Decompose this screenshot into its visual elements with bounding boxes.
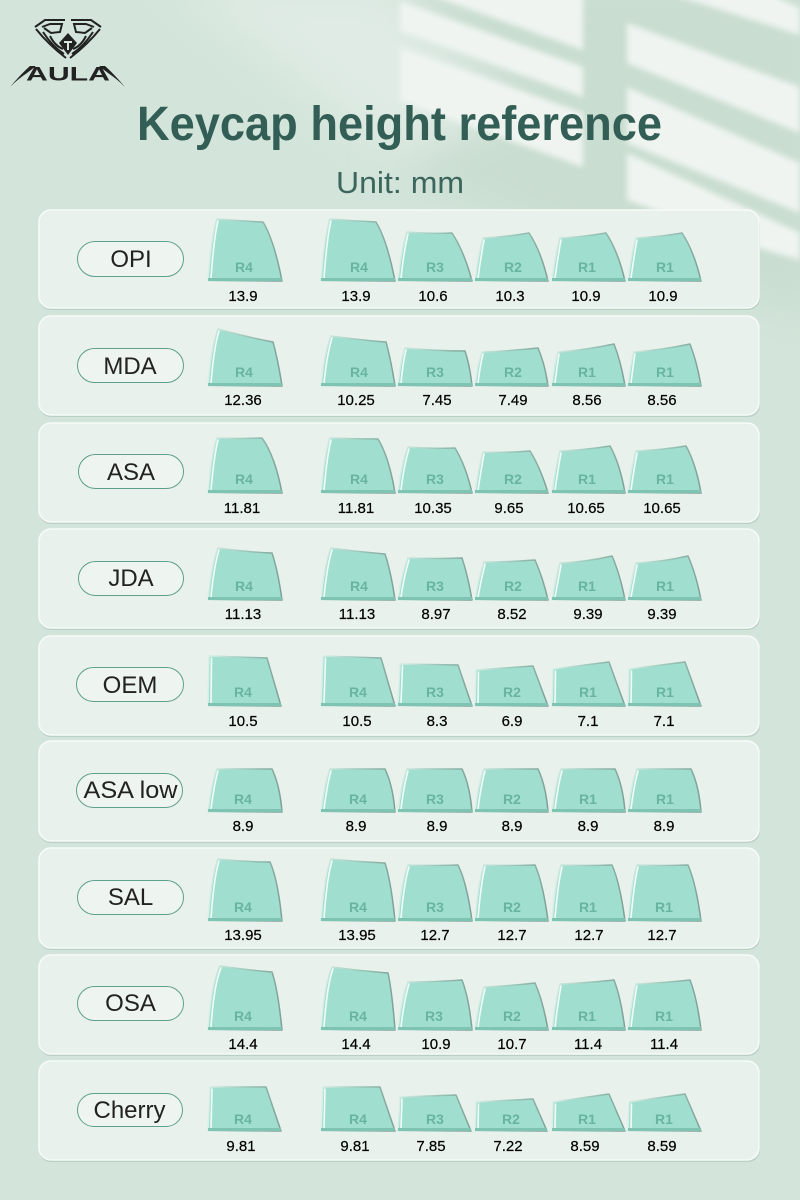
- keycap SAL R3 12.7: [398, 865, 472, 944]
- pill: OPI: [78, 242, 184, 276]
- keycap SAL R1 12.7: 12.7: [574, 927, 604, 944]
- keycap OSA R3 10.9: 10.9: [421, 1036, 451, 1053]
- keycap ASA low R2 8.9: R2: [503, 791, 521, 807]
- keycap ASA R2 9.65: R2: [504, 471, 522, 487]
- keycap OEM R4 10.5: [321, 656, 395, 730]
- panel: OSA: [39, 955, 760, 1056]
- keycap JDA R3 8.97: R3: [426, 578, 444, 594]
- keycap Cherry R4 9.81: R4: [234, 1111, 252, 1127]
- keycap Cherry R3 7.85: [398, 1095, 471, 1155]
- keycap ASA low R1 8.9: R1: [579, 791, 597, 807]
- logo: AULA: [10, 20, 125, 87]
- keycap OEM R1 7.1: 7.1: [654, 713, 674, 730]
- keycap ASA R1 10.65: R1: [578, 471, 596, 487]
- keycap JDA R3 8.97: 8.97: [421, 606, 451, 623]
- pill: JDA: [78, 562, 184, 596]
- keycap ASA low R1 8.9: [552, 769, 625, 835]
- keycap OEM R2 6.9: R2: [503, 684, 521, 700]
- keycap OSA R2 10.7: [475, 983, 548, 1053]
- keycap ASA low R2 8.9: [475, 769, 548, 835]
- keycap MDA R4 10.25: [321, 336, 395, 409]
- keycap SAL R4 13.95: 13.95: [338, 927, 376, 944]
- keycap OPI R1 10.9: [628, 233, 701, 305]
- keycap OSA R4 14.4: 14.4: [228, 1036, 258, 1053]
- keycap OSA R2 10.7: 10.7: [497, 1036, 527, 1053]
- keycap MDA R1 8.56: [552, 344, 625, 409]
- pill: OSA: OSA: [105, 990, 156, 1017]
- keycap OEM R1 7.1: [628, 662, 701, 730]
- keycap OEM R1 7.1: [552, 662, 625, 730]
- keycap SAL R4 13.95: R4: [234, 899, 252, 915]
- keycap MDA R2 7.49: [475, 348, 548, 409]
- keycap JDA R4 11.13: [321, 548, 395, 623]
- keycap SAL R2 12.7: 12.7: [497, 927, 527, 944]
- keycap MDA R3 7.45: [398, 348, 472, 409]
- keycap JDA R2 8.52: [475, 560, 548, 623]
- keycap ASA low R4 8.9: R4: [349, 791, 367, 807]
- keycap ASA R2 9.65: [475, 451, 548, 517]
- keycap MDA R1 8.56: [628, 344, 701, 409]
- keycap OEM R2 6.9: [475, 666, 548, 730]
- keycap MDA R4 12.36: R4: [235, 364, 253, 380]
- keycap ASA low R1 8.9: R1: [656, 791, 674, 807]
- keycap ASA R4 11.81: [208, 438, 282, 517]
- keycap SAL R1 12.7: R1: [655, 899, 673, 915]
- keycap JDA R4 11.13: R4: [235, 578, 253, 594]
- keycap Cherry R1 8.59: R1: [578, 1111, 596, 1127]
- keycap MDA R4 12.36: 12.36: [224, 392, 262, 409]
- keycap JDA R3 8.97: [398, 558, 472, 623]
- keycap JDA R1 9.39: 9.39: [647, 606, 677, 623]
- keycap OEM R4 10.5: 10.5: [228, 713, 258, 730]
- keycap MDA R1 8.56: 8.56: [572, 392, 602, 409]
- keycap OPI R2 10.3: 10.3: [495, 288, 525, 305]
- keycap ASA low R3 8.9: R3: [426, 791, 444, 807]
- keycap Cherry R4 9.81: [208, 1087, 281, 1155]
- keycap ASA low R1 8.9: [628, 769, 701, 835]
- keycap Cherry R1 8.59: 8.59: [647, 1138, 677, 1155]
- keycap ASA R4 11.81: 11.81: [338, 500, 374, 517]
- keycap SAL R2 12.7: [475, 865, 548, 944]
- keycap OEM R4 10.5: 10.5: [342, 713, 372, 730]
- keycap OPI R4 13.9: R4: [350, 259, 368, 275]
- pill: ASA: ASA: [107, 459, 155, 486]
- keycap OPI R4 13.9: [321, 219, 395, 305]
- pill: OPI: OPI: [110, 246, 152, 273]
- keycap OPI R2 10.3: R2: [504, 259, 522, 275]
- keycap OEM R1 7.1: R1: [579, 684, 597, 700]
- swoosh legs: [10, 66, 125, 87]
- keycap ASA R2 9.65: 9.65: [494, 500, 524, 517]
- keycap OSA R4 14.4: 14.4: [341, 1036, 371, 1053]
- keycap ASA R4 11.81: R4: [350, 471, 368, 487]
- keycap JDA R1 9.39: R1: [656, 578, 674, 594]
- keycap ASA low R1 8.9: 8.9: [578, 818, 598, 835]
- keycap JDA R1 9.39: R1: [578, 578, 596, 594]
- subtitle: unit: Unit: mm: [336, 165, 464, 200]
- keycap MDA R1 8.56: R1: [656, 364, 674, 380]
- keycap OEM R4 10.5: R4: [349, 684, 367, 700]
- keycap MDA R4 10.25: R4: [350, 364, 368, 380]
- keycap SAL R1 12.7: [628, 865, 701, 944]
- keycap SAL R4 13.95: 13.95: [224, 927, 262, 944]
- keycap JDA R1 9.39: 9.39: [573, 606, 603, 623]
- keycap OEM R4 10.5: [208, 656, 281, 730]
- pill: ASA low: ASA low: [84, 777, 178, 804]
- keycap OSA R1 11.4: [552, 980, 625, 1053]
- keycap MDA R1 8.56: R1: [578, 364, 596, 380]
- keycap JDA R1 9.39: [628, 556, 701, 623]
- keycap OEM R1 7.1: 7.1: [578, 713, 598, 730]
- keycap JDA R4 11.13: R4: [350, 578, 368, 594]
- keycap Cherry R3 7.85: 7.85: [416, 1138, 446, 1155]
- keycap ASA low R3 8.9: 8.9: [427, 818, 447, 835]
- pill: SAL: [78, 880, 184, 914]
- keycap OPI R3 10.6: R3: [426, 259, 444, 275]
- keycap OPI R3 10.6: [398, 232, 472, 305]
- keycap MDA R2 7.49: 7.49: [498, 392, 528, 409]
- panel: OEM: [39, 636, 760, 737]
- keycap ASA R4 11.81: 11.81: [224, 500, 260, 517]
- keycap OSA R1 11.4: 11.4: [650, 1036, 678, 1053]
- panel: ASA low: [39, 741, 760, 843]
- keycap JDA R4 11.13: [208, 548, 282, 623]
- keycap OEM R3 8.3: [398, 664, 472, 730]
- keycap MDA R1 8.56: 8.56: [647, 392, 677, 409]
- keycap MDA R3 7.45: R3: [426, 364, 444, 380]
- keycap OPI R3 10.6: 10.6: [418, 288, 448, 305]
- keycap MDA R4 12.36: [208, 329, 282, 409]
- icon: spider diamond emblem: [35, 20, 101, 58]
- panel: ASA: [39, 423, 760, 524]
- keycap OEM R2 6.9: 6.9: [502, 713, 522, 730]
- keycap OEM R1 7.1: R1: [656, 684, 674, 700]
- keycap OSA R3 10.9: [398, 980, 472, 1053]
- pill: MDA: [78, 348, 184, 382]
- keycap OPI R4 13.9: R4: [235, 259, 253, 275]
- keycap OPI R1 10.9: R1: [656, 259, 674, 275]
- keycap SAL R3 12.7: R3: [426, 899, 444, 915]
- panel: MDA: [39, 316, 760, 417]
- keycap Cherry R4 9.81: [321, 1087, 395, 1155]
- keycap OPI R4 13.9: [208, 219, 282, 305]
- keycap SAL R3 12.7: 12.7: [420, 927, 450, 944]
- keycap OPI R2 10.3: [475, 233, 548, 305]
- keycap ASA low R4 8.9: R4: [234, 791, 252, 807]
- keycap SAL R4 13.95: R4: [349, 899, 367, 915]
- keycap ASA low R2 8.9: 8.9: [502, 818, 522, 835]
- keycap MDA R3 7.45: 7.45: [422, 392, 452, 409]
- panel: JDA: [39, 529, 760, 630]
- keycap OSA R4 14.4: [208, 966, 282, 1053]
- keycap Cherry R4 9.81: R4: [349, 1111, 367, 1127]
- keycap JDA R2 8.52: R2: [504, 578, 522, 594]
- keycap ASA low R4 8.9: [321, 769, 395, 835]
- pill: Cherry: Cherry: [93, 1097, 166, 1124]
- keycap OSA R4 14.4: [321, 967, 395, 1053]
- keycap SAL R1 12.7: 12.7: [647, 927, 677, 944]
- panel: OPI: [39, 210, 760, 310]
- keycap Cherry R2 7.22: R2: [502, 1111, 520, 1127]
- keycap ASA R3 10.35: 10.35: [414, 500, 452, 517]
- panel: Cherry: [39, 1061, 760, 1162]
- keycap OSA R3 10.9: R3: [425, 1008, 443, 1024]
- keycap OPI R1 10.9: 10.9: [648, 288, 678, 305]
- keycap OPI R1 10.9: R1: [578, 259, 596, 275]
- wordmark: AULA: [26, 64, 110, 86]
- keycap SAL R2 12.7: R2: [503, 899, 521, 915]
- keycap ASA R3 10.35: R3: [426, 471, 444, 487]
- keycap OEM R4 10.5: R4: [234, 684, 252, 700]
- pill: JDA: JDA: [108, 565, 154, 592]
- keycap Cherry R1 8.59: [628, 1094, 701, 1155]
- keycap JDA R2 8.52: 8.52: [497, 606, 527, 623]
- keycap Cherry R2 7.22: [475, 1099, 547, 1155]
- keycap ASA R1 10.65: 10.65: [643, 500, 681, 517]
- keycap SAL R1 12.7: R1: [579, 899, 597, 915]
- keycap OPI R4 13.9: 13.9: [228, 288, 258, 305]
- keycap OPI R4 13.9: 13.9: [341, 288, 371, 305]
- title: Keycap height reference: [137, 98, 662, 151]
- pill: MDA: MDA: [103, 353, 157, 380]
- panel: SAL: [39, 848, 760, 950]
- keycap JDA R1 9.39: [552, 556, 625, 623]
- keycap Cherry R4 9.81: 9.81: [340, 1138, 370, 1155]
- keycap SAL R1 12.7: [552, 865, 625, 944]
- keycap OSA R4 14.4: R4: [234, 1008, 252, 1024]
- keycap ASA R3 10.35: [398, 447, 472, 517]
- keycap SAL R4 13.95: [321, 859, 395, 944]
- keycap Cherry R1 8.59: R1: [655, 1111, 673, 1127]
- pill: ASA: [78, 454, 184, 488]
- keycap Cherry R1 8.59: [552, 1094, 625, 1155]
- keycap ASA low R3 8.9: [398, 769, 472, 835]
- keycap Cherry R1 8.59: 8.59: [570, 1138, 600, 1155]
- keycap ASA low R4 8.9: 8.9: [346, 818, 366, 835]
- pill: SAL: SAL: [108, 884, 153, 911]
- keycap Cherry R3 7.85: R3: [426, 1111, 444, 1127]
- keycap ASA R1 10.65: R1: [656, 471, 674, 487]
- keycap OSA R2 10.7: R2: [503, 1008, 521, 1024]
- keycap OSA R1 11.4: 11.4: [574, 1036, 602, 1053]
- keycap ASA R1 10.65: 10.65: [567, 500, 605, 517]
- pill: OEM: [76, 668, 184, 702]
- keycap OSA R1 11.4: [628, 980, 701, 1053]
- keycap OPI R1 10.9: [552, 233, 625, 305]
- pill: OSA: [78, 986, 184, 1020]
- keycap OSA R1 11.4: R1: [578, 1008, 596, 1024]
- keycap SAL R4 13.95: [208, 859, 282, 944]
- keycap MDA R2 7.49: R2: [504, 364, 522, 380]
- keycap OSA R1 11.4: R1: [655, 1008, 673, 1024]
- keycap Cherry R4 9.81: 9.81: [226, 1138, 256, 1155]
- keycap ASA R1 10.65: [628, 446, 701, 517]
- keycap ASA low R4 8.9: 8.9: [233, 818, 253, 835]
- pill: ASA low: [76, 774, 182, 808]
- keycap OEM R3 8.3: R3: [426, 684, 444, 700]
- keycap ASA low R1 8.9: 8.9: [654, 818, 674, 835]
- pill: Cherry: [78, 1094, 182, 1126]
- keycap Cherry R2 7.22: 7.22: [493, 1138, 523, 1155]
- keycap OSA R4 14.4: R4: [349, 1008, 367, 1024]
- keycap ASA R4 11.81: [321, 438, 395, 517]
- keycap ASA R4 11.81: R4: [235, 471, 253, 487]
- keycap ASA low R4 8.9: [208, 769, 282, 835]
- keycap ASA R1 10.65: [552, 446, 625, 517]
- keycap MDA R4 10.25: 10.25: [337, 392, 375, 409]
- pill: OEM: OEM: [103, 672, 157, 699]
- keycap JDA R4 11.13: 11.13: [225, 606, 261, 623]
- keycap JDA R4 11.13: 11.13: [339, 606, 375, 623]
- keycap OPI R1 10.9: 10.9: [571, 288, 601, 305]
- keycap OEM R3 8.3: 8.3: [427, 713, 447, 730]
